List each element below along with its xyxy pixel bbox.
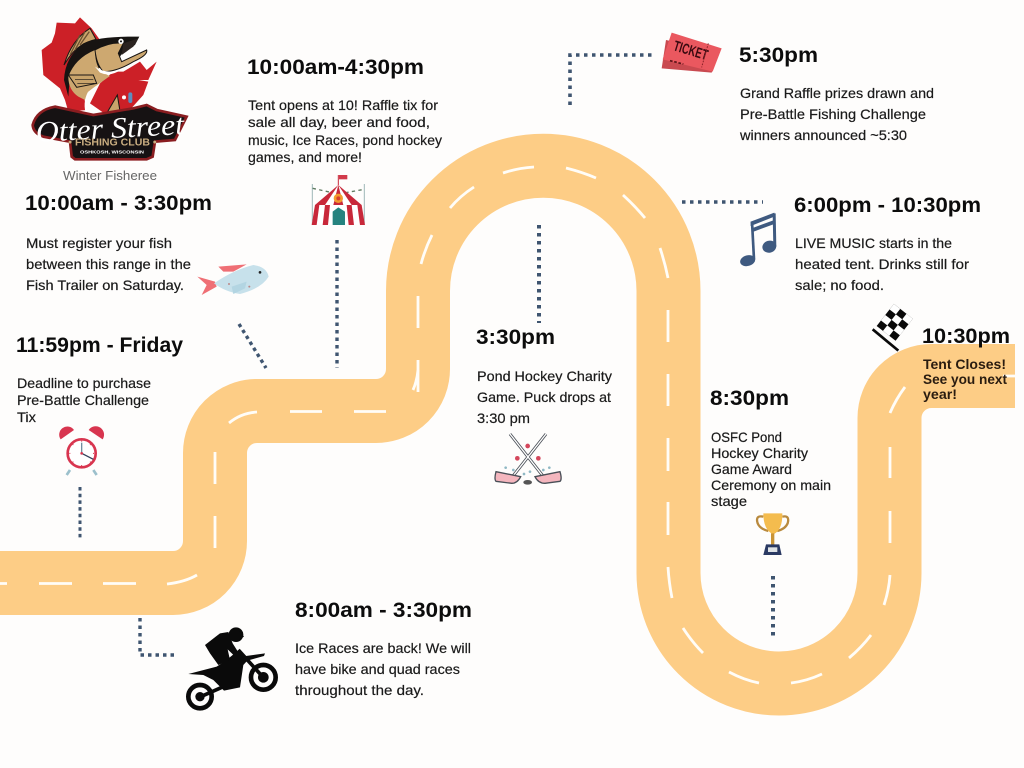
logo: Otter Street Fishing Club (33, 17, 187, 159)
logo caption: Winter Fisheree (63, 168, 157, 183)
icon: checkered flag (873, 304, 913, 351)
text block: 10:30pm tent closes: year! (923, 386, 957, 402)
text block: 11:59pm Friday: Deadline to purchase (17, 375, 151, 391)
text block: 6:00pm live music: heated tent. Drinks still for (795, 256, 969, 272)
text block: 10:00am - 3:30pm register: Must register your fish (26, 235, 172, 251)
logo: Otter Street Fishing Club: OSHKOSH, WISCONSIN (80, 150, 144, 156)
text block: 5:30pm raffle (739, 44, 934, 143)
icon: music notes (739, 213, 778, 268)
text block: 8:00am ice races: throughout the day. (295, 682, 424, 698)
text block: 3:30pm pond hockey: 3:30pm (476, 326, 555, 349)
text block: 11:59pm Friday (16, 334, 183, 425)
text block: 8:30pm award: Ceremony on main (711, 477, 831, 493)
text block: 8:30pm award: OSFC Pond (711, 429, 782, 445)
logo: Otter Street Fishing Club: • FISHING CLUB • (68, 137, 157, 148)
text block: 8:00am ice races: have bike and quad races (295, 661, 460, 677)
text block: 10:00am - 3:30pm register: 10:00am - 3:30pm (25, 192, 212, 215)
logo walleye fish (64, 28, 147, 116)
text block: 10:00am-4:30pm tent (247, 56, 442, 165)
connector dotted lines (80, 55, 773, 655)
text block: 6:00pm live music: LIVE MUSIC starts in the (795, 235, 952, 251)
text block: 3:30pm pond hockey: Game. Puck drops at (477, 389, 611, 405)
text block: 8:30pm award: 8:30pm (710, 387, 789, 410)
text block: 8:30pm award: Game Award (711, 461, 792, 477)
text block: 6:00pm live music (794, 194, 981, 293)
text block: 5:30pm raffle: 5:30pm (739, 44, 818, 67)
text block: 10:00am - 3:30pm register: Fish Trailer on Saturday. (26, 277, 184, 293)
text block: 8:00am ice races (295, 599, 472, 698)
icon: circus tent (312, 175, 365, 225)
text block: 8:30pm award: stage (711, 493, 747, 509)
text block: 10:00am-4:30pm tent: Tent opens at 10! Raffle tix for (248, 97, 438, 113)
text block: 5:30pm raffle: Pre-Battle Fishing Challenge (740, 106, 926, 122)
text block: 8:30pm award (710, 387, 831, 509)
text block: 10:30pm tent closes: Tent Closes! (923, 356, 1006, 372)
icon: trophy (757, 513, 788, 555)
text block: 8:30pm award: Hockey Charity (711, 445, 808, 461)
icon: fish (197, 264, 269, 295)
icon: raffle ticket (662, 33, 722, 73)
text block: 10:00am-4:30pm tent: music, Ice Races, pond hockey (248, 132, 442, 148)
icon: raffle ticket: TICKET (671, 39, 710, 64)
text block: 8:00am ice races: Ice Races are back! We will (295, 640, 471, 656)
road centre dashes (0, 167, 1015, 683)
text block: 3:30pm pond hockey: Pond Hockey Charity (477, 368, 612, 384)
logo banner (33, 105, 187, 159)
text block: 11:59pm Friday: 11:59pm - Friday (16, 334, 183, 357)
text block: 10:00am-4:30pm tent: games, and more! (248, 149, 362, 165)
winding road (0, 166, 1015, 684)
text block: 10:00am-4:30pm tent: sale all day, beer and food, (248, 114, 430, 130)
text block: 3:30pm pond hockey (476, 326, 612, 426)
text block: 10:30pm tent closes: 10:30pm (922, 325, 1010, 348)
text block: 3:30pm pond hockey: 3:30 pm (477, 410, 530, 426)
icon: alarm clock (59, 426, 104, 475)
text block: 6:00pm live music: sale; no food. (795, 277, 884, 293)
text block: 10:30pm tent closes (922, 325, 1010, 402)
text block: 10:00am - 3:30pm register (25, 192, 212, 293)
text block: 5:30pm raffle: winners announced ~5:30 (739, 127, 907, 143)
text block: 10:00am-4:30pm tent: 10:00am-4:30pm (247, 56, 424, 79)
icon: motorbike rider (188, 627, 276, 708)
logo red state shape (42, 17, 157, 115)
text block: 11:59pm Friday: Pre-Battle Challenge (17, 392, 149, 408)
text block: 10:00am - 3:30pm register: between this range in the (26, 256, 191, 272)
icon: hockey sticks (495, 434, 561, 485)
text block: 6:00pm live music: 6:00pm - 10:30pm (794, 194, 981, 217)
text block: 10:30pm tent closes: See you next (923, 371, 1007, 387)
text block: 11:59pm Friday: Tix (17, 409, 36, 425)
text block: 8:00am ice races: 8:00am - 3:30pm (295, 599, 472, 622)
text block: 5:30pm raffle: Grand Raffle prizes drawn and (740, 85, 934, 101)
logo: Otter Street Fishing Club: Otter Street (35, 109, 186, 149)
